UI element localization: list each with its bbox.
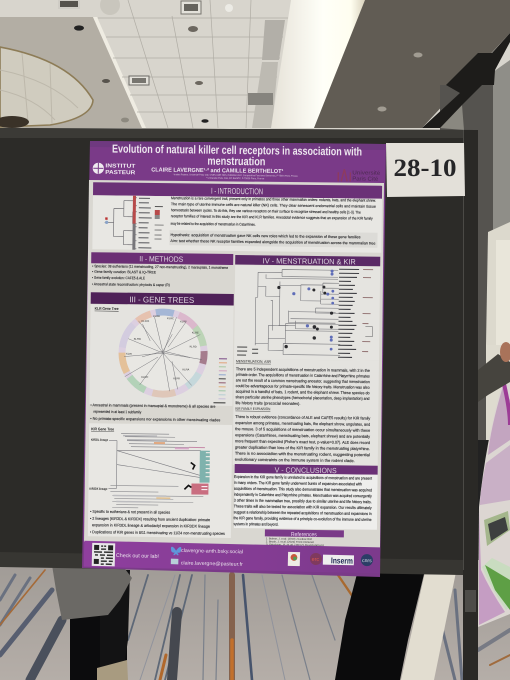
white column	[401, 572, 456, 680]
KIR findings: • Specific to eutherians & not present in all species	[90, 509, 170, 515]
KIR findings	[90, 509, 225, 536]
person left: coat and legs	[52, 565, 132, 680]
menstruation paragraph: primate order. The acquisitions of menstruation in Catarrhine and Platyrrhine primates	[236, 372, 370, 379]
QR code	[92, 543, 115, 566]
KIR findings: • 2 lineages (KIR3DL & KIR3DX) resulting from ancient duplication: primate	[90, 516, 210, 522]
carpet floor	[0, 560, 510, 680]
panel: conclusions text: the KIR gene family, providing evidence of a principle co-evolution of the immune and uterine	[234, 515, 372, 522]
poster content group	[88, 143, 383, 548]
chart: circular KLR tree: KLRJ1	[142, 319, 150, 323]
Bluesky handle: clavergne-anth.bsky.social	[181, 548, 243, 555]
heading: KIR tree: KIR Gene Tree	[91, 426, 115, 432]
room number card: 28-10	[394, 155, 456, 182]
authors and affiliations: ² Université Paris Cité, ED BioSPC, F-75006 Paris, France	[206, 177, 265, 180]
panel: methods list: • Species: 38 eutherians (11 menstruating, 27 non-menstruating), 2 marsupials, 1 monotreme	[92, 264, 228, 270]
menstruation paragraph: share particular uterine phenotypes (hemochorial placentation, deep implantation) and	[236, 394, 370, 401]
authors and affiliations: ¹ Institut Pasteur, Université Paris Cité, CNRS UMR 3525, INSERM UA12, Comparative Functional Genomics, F-75015 Paris, France	[173, 173, 298, 178]
logo: Université Paris Cité: Paris Cité	[352, 176, 378, 183]
chart: circular KLR tree: KLRC	[167, 316, 174, 320]
references: 2. Brosh, J. et al. (2021) Front Immunol	[266, 539, 314, 544]
KIR findings: expansion in KIR3DL lineage & artiodactyl expansion in KIR3DX lineage	[92, 522, 210, 529]
icon: email	[171, 559, 178, 564]
panel: methods list: • Gene family curation: BLAST & IQ-TREE	[92, 270, 157, 275]
chart: circular KLR tree: KLRI	[126, 352, 132, 356]
call to action: Check out our lab!	[116, 553, 159, 560]
introduction paragraph: Menstruation is a rare convergent trait, present only in primates and three other mammalian orders: rodents, bats, and the elephant shrew.	[171, 196, 376, 203]
bottom contact band	[84, 541, 380, 573]
panel: conclusions text: independently in Catarrhine and Platyrrhine primates. Menstruation was acquired convergently	[234, 492, 372, 498]
chandelier	[0, 47, 93, 128]
KLR findings	[90, 403, 221, 422]
references: References	[291, 532, 317, 538]
KIR expansion paragraph: the mouse. 3 of 5 acquisitions of menstruation occur simultaneously with these	[235, 426, 371, 433]
chart: circular KLR tree: KLRH	[141, 375, 148, 379]
title: menstruation	[207, 156, 265, 168]
icon: Bluesky butterfly	[171, 547, 181, 555]
menstruation paragraph: There are 5 independent acquisitions of menstruation in mammals, with 2 in the	[236, 366, 371, 373]
chart: circular KLR tree: KLRE	[192, 330, 199, 335]
KIR expansion paragraph	[235, 414, 371, 463]
KIR expansion paragraph: expansion among primates, menstruating bats, the elephant shrew, ungulates, and	[235, 420, 370, 427]
title: Evolution of natural killer cell receptors in association with	[112, 143, 362, 159]
partner logos: Inserm	[331, 555, 353, 566]
introduction paragraph: Aim: test whether these NK receptor families expanded alongside the acquisition of menstruation across the mammalian tree	[170, 239, 375, 245]
chart: circular KLR tree	[122, 312, 205, 395]
display board	[0, 128, 478, 680]
panel: conclusions text	[233, 473, 378, 530]
section header: conclusions	[235, 464, 378, 476]
panel: menstruation and KIR text	[233, 359, 379, 467]
KIR expansion paragraph: There is no association with the menstruating rodent, suggesting potential	[235, 451, 370, 457]
panel: introduction	[92, 195, 382, 253]
chart: circular KLR tree: KLRK	[173, 376, 180, 380]
KIR expansion paragraph: evolutionary constraints on the immune system in the rodent clade.	[235, 457, 355, 463]
introduction paragraph: may be related to the acquisition of menstruation in Catarrhines.	[171, 222, 256, 227]
phylogeny figure with menstruation bars	[104, 195, 164, 250]
introduction paragraph: The main type of uterine immune cells are natural killer (NK) cells. They clear senescent endometrial cells and maintain tissue	[171, 202, 376, 209]
chart: circular KLR tree: KLRD	[190, 344, 197, 349]
chart: KIR tree with lineages: KIR3DL lineage	[91, 438, 108, 442]
references	[265, 529, 344, 547]
menstruation paragraph: are not the result of a common menstruating ancestor, suggesting that menstruation	[236, 377, 370, 384]
logo: Institut Pasteur: PASTEUR	[105, 170, 135, 176]
panel: conclusions text: Expansion in the KIR gene family is unrelated to acquisitions of menstruation and are present	[234, 474, 373, 481]
panel: conclusions text: acquisitions of menstruation. This study also demonstrates that menstruation was acquired	[234, 486, 372, 492]
section header: introduction	[93, 182, 382, 199]
person right: black trousers	[335, 570, 425, 680]
chart: circular KLR tree: KLRF	[180, 319, 187, 323]
subheading: KIR family expansion: KIR FAMILY EXPANSION	[235, 407, 271, 411]
chart: circular KLR tree: KLRB	[153, 314, 160, 318]
logo: Université Paris Cité: Université	[352, 170, 380, 177]
panel: methods list: • Ancestral state reconstruction: phytools & caper (R)	[92, 282, 170, 287]
chart: circular KLR tree: KLRG	[134, 337, 141, 341]
subheading: menstruation: MENSTRUATION, ASR	[236, 360, 271, 364]
partner logos	[288, 552, 373, 568]
references: 1. Bulmer, J. et al. (2010) J Leukoc Biol	[266, 536, 312, 541]
introduction paragraph: homeostasis between cycles. To do this, they use various receptors on their surface to recognize stressed and healthy cells [1-3]. The	[171, 208, 361, 215]
panel: methods list: • Gene family evolution: CAFE5 & ALE	[92, 276, 146, 280]
authors and affiliations: CLAIRE LAVERGNE¹·² and CAMILLE BERTHELOT¹	[151, 166, 283, 175]
panel: conclusions text: These traits will also be tested for association with KIR expansion. Our results ultimately	[234, 503, 372, 510]
partner logos: erc	[312, 557, 320, 563]
KIR findings: • Duplications of KIR genes in 8/11 menstruating vs 11/24 non-menstruating species	[90, 529, 225, 536]
legend: KLR subfamilies	[213, 359, 227, 403]
panel: conclusions text: systems in primates and beyond.	[233, 521, 279, 527]
chart: KIR tree with lineages: KIR3DX lineage	[89, 487, 108, 491]
chart: KIR tree with lineages	[89, 433, 212, 509]
rolled poster right	[478, 384, 510, 627]
panel: conclusions text: suggest a relationship between the repeated acquisitions of menstruation and expansions in	[234, 509, 372, 516]
logo: Université Paris Cité	[338, 169, 380, 183]
ceiling background	[0, 0, 510, 135]
panel: methods list	[92, 264, 228, 288]
person arm and hand	[478, 342, 510, 402]
email address: claire.lavergne@pasteur.fr	[181, 560, 243, 568]
title	[112, 143, 362, 170]
KIR expansion paragraph: expansions (Catarrhines, menstruating bats, elephant shrew) and are potentially	[235, 432, 370, 439]
section header: menstruation and KIR: IV - MENSTRUATION & KIR	[263, 256, 356, 266]
panel: KLR gene tree	[89, 304, 234, 406]
logo: Institut Pasteur: INSTITUT	[105, 163, 136, 170]
menstruation paragraph: acquired in a handful of bats, 1 rodent, and the elephant shrew. These species do	[236, 389, 370, 395]
right wall and cornice	[422, 33, 510, 440]
panel: KIR gene tree	[88, 423, 232, 538]
section header: conclusions: V - CONCLUSIONS	[275, 465, 337, 475]
menstruation paragraph	[235, 366, 371, 407]
KIR expansion paragraph: more frequent than expected (Fisher's exact test, p-value=0.07). ALE does record	[235, 438, 370, 445]
section header: menstruation and KIR	[235, 255, 380, 267]
section header: methods	[91, 252, 233, 265]
menstruation paragraph: could be advantageous for primate-specific life history traits. Menstruation was also	[236, 383, 370, 390]
heading: KLR tree: KLR Gene Tree	[95, 306, 119, 311]
section header: gene trees: III - GENE TREES	[129, 295, 195, 305]
chart: species tree	[237, 268, 373, 358]
logo: Institut Pasteur	[93, 163, 136, 176]
section header: gene trees	[91, 292, 234, 305]
introduction paragraph: Hypothesis: acquisition of menstruation gave NK cells new roles which led to the expansion of these gene families	[170, 233, 361, 239]
panel: conclusions text: in many orders. The KIR gene family underwent bursts of expansion associated with	[234, 480, 362, 486]
references: 3. Brighton, P. et al. (2017) Development	[266, 542, 324, 547]
panel: conclusions text: 3 other times in the mammalian tree, possibly due to similar uterine and life history traits.	[234, 498, 372, 504]
panel: menstruation and KIR tree	[234, 265, 380, 361]
introduction paragraph	[170, 196, 376, 245]
chart: circular KLR tree: KLRA	[182, 367, 190, 371]
KLR findings: represented in at least 1 subfamily	[93, 410, 141, 414]
section header: methods: II - METHODS	[139, 254, 183, 264]
KIR expansion paragraph: greater duplication than loss of the KIR family in the menstruating platyrrhine.	[235, 444, 370, 451]
authors and affiliations	[151, 166, 299, 181]
room number card	[386, 143, 465, 197]
partner logos: cnrs	[362, 558, 372, 564]
section header: introduction: I - INTRODUCTION	[211, 186, 263, 196]
poster sheet	[82, 141, 386, 577]
introduction paragraph: receptor families of interest in this study are the KIR and KLR families. Anecdotal evidence suggests that an expansion of the KIR family	[171, 214, 373, 221]
KLR findings: • Ancestral in mammals (present in marsupial & monotreme) & all species are	[90, 403, 215, 409]
KLR findings: • No primate-specific expansions nor expansions in other menstruating clades	[90, 417, 220, 422]
KIR expansion paragraph: There is robust evidence (concordance of ALE and CAFE5 results) for KIR family	[235, 414, 370, 421]
menstruation paragraph: life history traits (precocial neonates).	[235, 400, 301, 406]
